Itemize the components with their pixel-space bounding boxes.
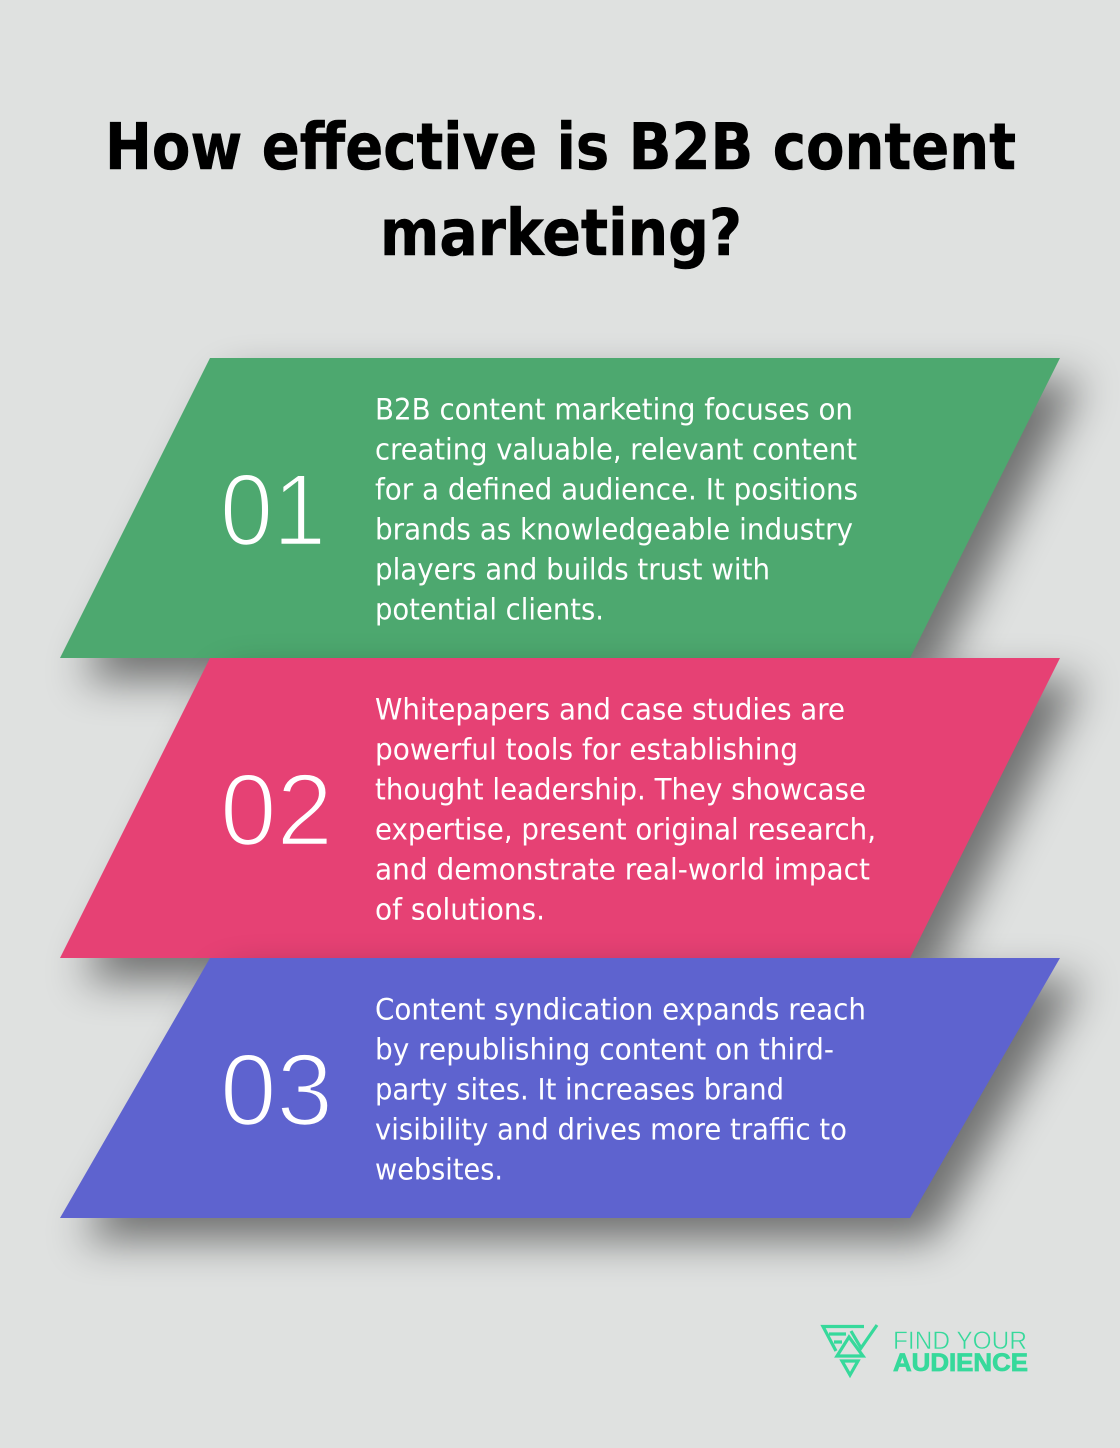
text block 01 [375, 392, 858, 626]
text block 03: by republishing content on third- [375, 1032, 834, 1066]
logo wordmark [893, 1327, 1028, 1377]
title: marketing? [380, 197, 742, 271]
number 01: 01 [220, 453, 326, 567]
title: How effective is B2B content [105, 111, 1016, 185]
text block 02: expertise, present original research, [375, 812, 876, 846]
text block 02 [375, 692, 876, 926]
text block 02: powerful tools for establishing [375, 732, 798, 766]
text block 03 [375, 992, 866, 1186]
icon: logo triangles [823, 1325, 877, 1375]
text block 03: party sites. It increases brand [375, 1072, 784, 1106]
text block 02: thought leadership. They showcase [375, 772, 866, 806]
text block 01: for a defined audience. It positions [375, 472, 858, 506]
text block 01: potential clients. [375, 592, 604, 626]
text block 03: Content syndication expands reach [375, 992, 866, 1026]
text block 01: B2B content marketing focuses on [375, 392, 853, 426]
panel: step 02 [60, 658, 1082, 980]
number 03: 03 [220, 1033, 333, 1147]
text block 02: Whitepapers and case studies are [375, 692, 845, 726]
text block 02: of solutions. [375, 892, 545, 926]
logo wordmark: AUDIENCE [893, 1349, 1028, 1377]
title [105, 111, 1016, 271]
logo: Find Your Audience [823, 1325, 1028, 1377]
text block 01: players and builds trust with [375, 552, 770, 586]
text block 03: websites. [375, 1152, 503, 1186]
number 02: 02 [220, 753, 333, 867]
text block 01: brands as knowledgeable industry [375, 512, 853, 546]
panel: step 01 [60, 358, 1082, 680]
logo wordmark: FIND YOUR [893, 1327, 1027, 1355]
text block 03: visibility and drives more traffic to [375, 1112, 847, 1146]
panel: step 03 [60, 958, 1082, 1240]
text block 01: creating valuable, relevant content [375, 432, 857, 466]
text block 02: and demonstrate real-world impact [375, 852, 870, 886]
